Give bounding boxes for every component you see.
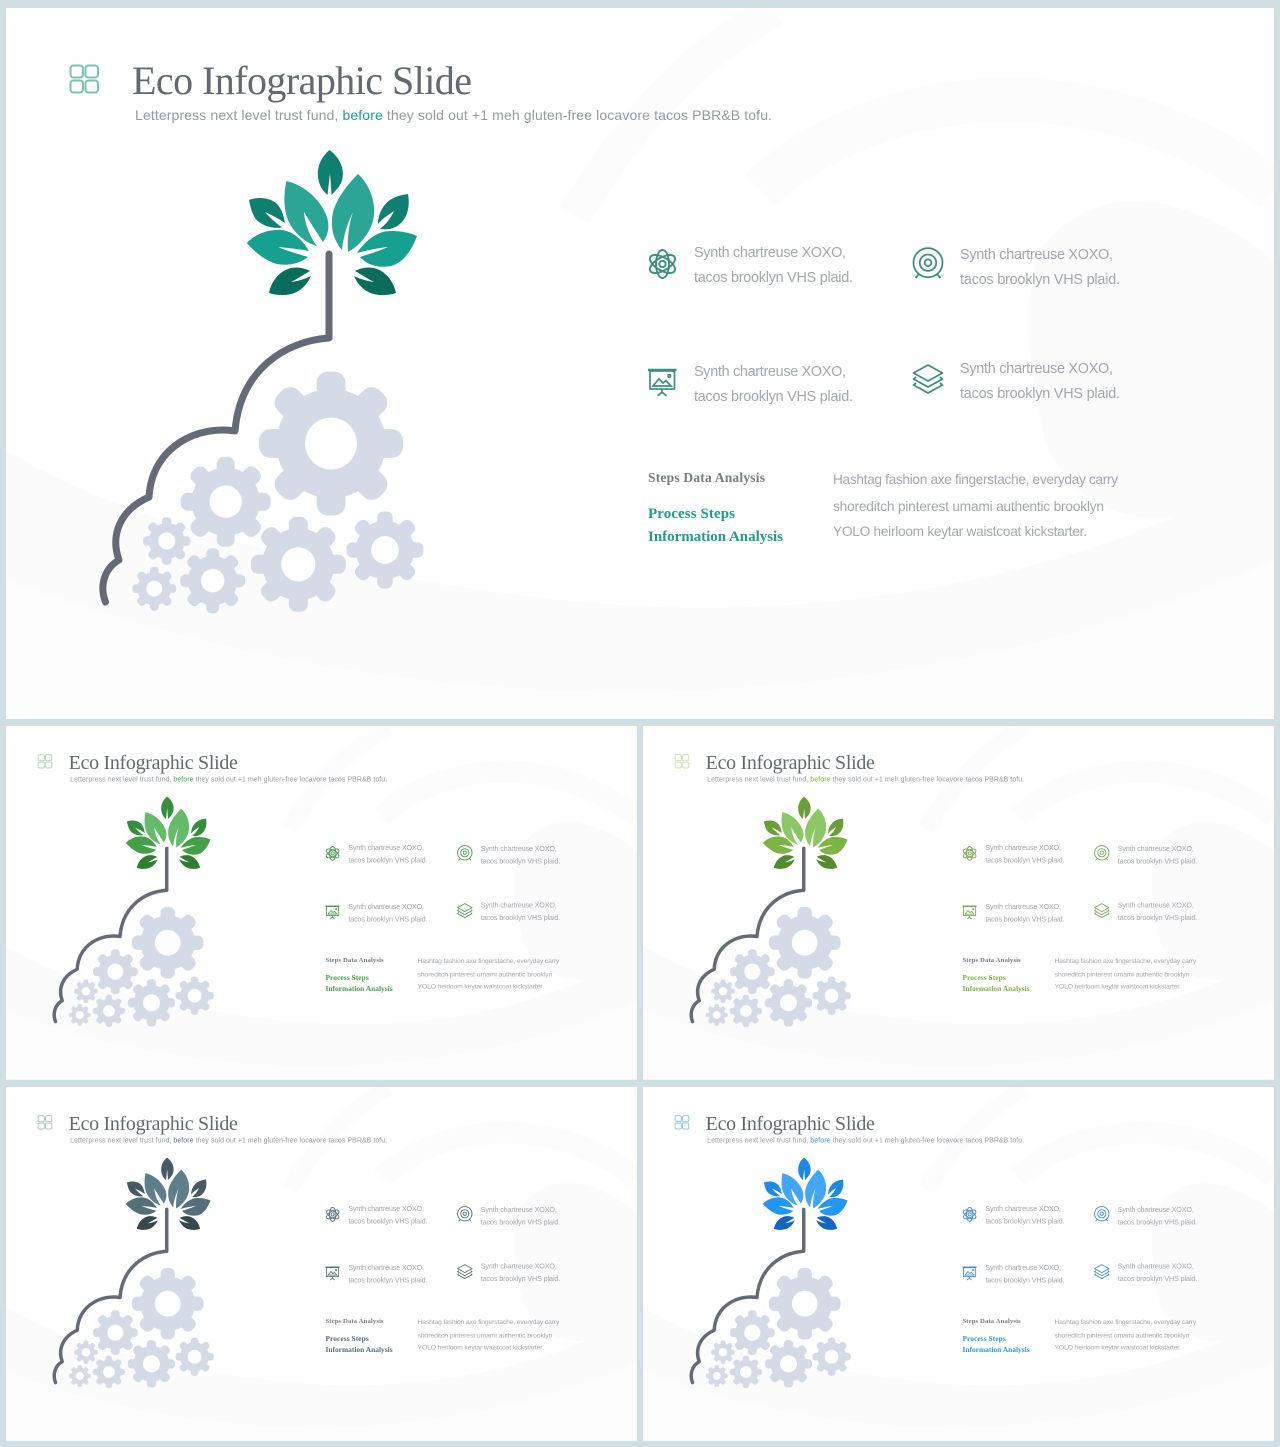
feature text 4 xyxy=(481,1263,560,1283)
paragraph: Hashtag fashion axe fingerstache, everyday carry xyxy=(1055,958,1197,965)
title: Eco Infographic Slide xyxy=(706,1113,875,1135)
paragraph: shoreditch pinterest umami authentic brooklyn xyxy=(418,1332,553,1339)
tree leaves xyxy=(763,797,848,869)
icon: presentation board xyxy=(325,906,340,919)
icon: target xyxy=(458,1207,472,1221)
process heading xyxy=(962,973,1030,993)
process heading: Process Steps xyxy=(325,1334,369,1343)
cloud outline stem xyxy=(103,254,329,602)
feature text 2: tacos brooklyn VHS plaid. xyxy=(481,857,560,865)
feature text 2: tacos brooklyn VHS plaid. xyxy=(1118,857,1197,865)
feature text 1 xyxy=(985,1205,1064,1225)
icon: target xyxy=(1095,1207,1109,1221)
icon: presentation board xyxy=(962,906,977,919)
paragraph: Hashtag fashion axe fingerstache, everyday carry xyxy=(418,1319,560,1326)
feature text 3 xyxy=(348,903,427,924)
steps heading: Steps Data Analysis xyxy=(648,470,765,485)
subtitle: Letterpress next level trust fund, before they sold out +1 meh gluten-free locavore tacos PBR&B tofu. xyxy=(70,777,387,784)
icon: target xyxy=(914,248,942,278)
feature text 1 xyxy=(348,844,427,864)
paragraph: YOLO heirloom keytar waistcoat kickstarter. xyxy=(1055,984,1181,991)
process heading: Information Analysis xyxy=(325,1345,393,1354)
cloud outline stem xyxy=(691,1209,804,1383)
feature text 2 xyxy=(481,1206,560,1226)
steps heading: Steps Data Analysis xyxy=(325,957,384,964)
icon: title grid xyxy=(38,1116,52,1129)
feature text 1: tacos brooklyn VHS plaid. xyxy=(348,1217,427,1225)
paragraph: Hashtag fashion axe fingerstache, everyday carry xyxy=(418,958,560,965)
feature text 1: tacos brooklyn VHS plaid. xyxy=(694,270,853,286)
feature text 2: Synth chartreuse XOXO, xyxy=(481,1206,557,1214)
subtitle: Letterpress next level trust fund, before they sold out +1 meh gluten-free locavore tacos PBR&B tofu. xyxy=(70,1138,387,1145)
feature text 3: tacos brooklyn VHS plaid. xyxy=(985,1277,1064,1285)
title: Eco Infographic Slide xyxy=(706,752,875,774)
feature text 1: tacos brooklyn VHS plaid. xyxy=(348,856,427,864)
paragraph xyxy=(1055,958,1197,991)
process heading: Process Steps xyxy=(648,506,735,522)
process heading: Information Analysis xyxy=(325,984,393,993)
process heading: Information Analysis xyxy=(648,529,783,545)
icon: presentation board xyxy=(325,1267,340,1280)
paragraph: shoreditch pinterest umami authentic brooklyn xyxy=(418,971,553,978)
icon: title grid xyxy=(38,755,52,768)
feature text 1: Synth chartreuse XOXO, xyxy=(348,844,424,852)
feature text 4: tacos brooklyn VHS plaid. xyxy=(960,386,1120,402)
feature text 2: Synth chartreuse XOXO, xyxy=(481,845,557,853)
feature text 3 xyxy=(348,1264,427,1285)
icon: layers xyxy=(1095,1265,1109,1279)
feature text 3: tacos brooklyn VHS plaid. xyxy=(985,916,1064,924)
process heading xyxy=(325,973,393,993)
feature text 3 xyxy=(694,364,853,405)
feature text 1: tacos brooklyn VHS plaid. xyxy=(985,856,1064,864)
feature text 2 xyxy=(960,247,1120,288)
icon: title grid xyxy=(675,1116,689,1129)
feature text 2 xyxy=(1118,1206,1197,1226)
tree leaves xyxy=(763,1158,848,1230)
process heading xyxy=(962,1334,1030,1354)
feature text 4: tacos brooklyn VHS plaid. xyxy=(481,914,560,922)
feature text 3 xyxy=(985,903,1064,924)
paragraph xyxy=(833,472,1118,539)
subtitle: Letterpress next level trust fund, before they sold out +1 meh gluten-free locavore tacos PBR&B tofu. xyxy=(707,1138,1024,1145)
feature text 2: Synth chartreuse XOXO, xyxy=(960,247,1113,263)
tree leaves xyxy=(126,1158,211,1230)
feature text 3: Synth chartreuse XOXO, xyxy=(985,903,1061,911)
feature text 2 xyxy=(1118,845,1197,865)
icon: presentation board xyxy=(962,1267,977,1280)
paragraph: shoreditch pinterest umami authentic brooklyn xyxy=(1055,1332,1190,1339)
feature text 4: Synth chartreuse XOXO, xyxy=(1118,902,1194,910)
gears cluster xyxy=(69,907,214,1027)
icon: layers xyxy=(458,1265,472,1279)
feature text 3: Synth chartreuse XOXO, xyxy=(348,903,424,911)
title: Eco Infographic Slide xyxy=(132,58,472,103)
paragraph: YOLO heirloom keytar waistcoat kickstarter. xyxy=(418,984,544,991)
paragraph: Hashtag fashion axe fingerstache, everyday carry xyxy=(1055,1319,1197,1326)
icon: title grid xyxy=(70,66,98,92)
feature text 4 xyxy=(1118,1263,1197,1283)
gears cluster xyxy=(132,372,424,613)
feature text 4: tacos brooklyn VHS plaid. xyxy=(481,1275,560,1283)
feature text 3: Synth chartreuse XOXO, xyxy=(694,364,846,380)
feature text 3: tacos brooklyn VHS plaid. xyxy=(348,916,427,924)
feature text 4: tacos brooklyn VHS plaid. xyxy=(1118,914,1197,922)
feature text 2: tacos brooklyn VHS plaid. xyxy=(481,1218,560,1226)
paragraph: YOLO heirloom keytar waistcoat kickstarter. xyxy=(833,524,1087,539)
feature text 3: tacos brooklyn VHS plaid. xyxy=(694,389,853,405)
tree leaves xyxy=(126,797,211,869)
icon: layers xyxy=(458,904,472,918)
panel: blue slide xyxy=(643,1087,1274,1441)
paragraph xyxy=(1055,1319,1197,1352)
steps heading: Steps Data Analysis xyxy=(962,1318,1021,1325)
feature text 4: Synth chartreuse XOXO, xyxy=(1118,1263,1194,1271)
feature text 2: tacos brooklyn VHS plaid. xyxy=(1118,1218,1197,1226)
panel: main teal slide xyxy=(6,8,1274,719)
icon: atom xyxy=(325,846,340,860)
paragraph xyxy=(418,958,560,991)
paragraph: shoreditch pinterest umami authentic brooklyn xyxy=(833,499,1104,514)
icon: presentation board xyxy=(648,370,676,396)
subtitle: Letterpress next level trust fund, before they sold out +1 meh gluten-free locavore tacos PBR&B tofu. xyxy=(135,107,772,123)
icon: atom xyxy=(962,1207,977,1221)
feature text 3 xyxy=(985,1264,1064,1285)
process heading: Process Steps xyxy=(962,973,1006,982)
feature text 1: Synth chartreuse XOXO, xyxy=(694,245,846,261)
gears cluster xyxy=(706,1268,851,1388)
feature text 4: Synth chartreuse XOXO, xyxy=(481,1263,557,1271)
icon: target xyxy=(1095,846,1109,860)
process heading xyxy=(325,1334,393,1354)
process heading: Information Analysis xyxy=(962,984,1030,993)
process heading: Information Analysis xyxy=(962,1345,1030,1354)
gears cluster xyxy=(69,1268,214,1388)
feature text 3: Synth chartreuse XOXO, xyxy=(348,1264,424,1272)
feature text 2 xyxy=(481,845,560,865)
feature text 1: Synth chartreuse XOXO, xyxy=(985,844,1061,852)
process heading: Process Steps xyxy=(962,1334,1006,1343)
paragraph: shoreditch pinterest umami authentic brooklyn xyxy=(1055,971,1190,978)
panel: slate slide xyxy=(6,1087,637,1441)
cloud outline stem xyxy=(54,1209,167,1383)
feature text 4 xyxy=(1118,902,1197,922)
icon: atom xyxy=(325,1207,340,1221)
feature text 4: Synth chartreuse XOXO, xyxy=(960,361,1113,377)
cloud outline stem xyxy=(54,848,167,1022)
subtitle: Letterpress next level trust fund, before they sold out +1 meh gluten-free locavore tacos PBR&B tofu. xyxy=(707,777,1024,784)
paragraph: YOLO heirloom keytar waistcoat kickstarter. xyxy=(418,1345,544,1352)
icon: atom xyxy=(962,846,977,860)
gears cluster xyxy=(706,907,851,1027)
icon: title grid xyxy=(675,755,689,768)
panel: green slide xyxy=(6,726,637,1080)
feature text 2: Synth chartreuse XOXO, xyxy=(1118,1206,1194,1214)
icon: atom xyxy=(647,250,678,278)
icon: layers xyxy=(1095,904,1109,918)
feature text 3: Synth chartreuse XOXO, xyxy=(985,1264,1061,1272)
process heading xyxy=(648,506,783,545)
feature text 2: tacos brooklyn VHS plaid. xyxy=(960,272,1120,288)
steps heading: Steps Data Analysis xyxy=(325,1318,384,1325)
icon: layers xyxy=(914,365,942,393)
feature text 3: tacos brooklyn VHS plaid. xyxy=(348,1277,427,1285)
paragraph xyxy=(418,1319,560,1352)
feature text 1: Synth chartreuse XOXO, xyxy=(985,1205,1061,1213)
feature text 4 xyxy=(481,902,560,922)
tree leaves xyxy=(247,150,417,295)
feature text 1 xyxy=(694,245,853,286)
feature text 1 xyxy=(985,844,1064,864)
feature text 4: Synth chartreuse XOXO, xyxy=(481,902,557,910)
icon: target xyxy=(458,846,472,860)
cloud outline stem xyxy=(691,848,804,1022)
feature text 1 xyxy=(348,1205,427,1225)
steps heading: Steps Data Analysis xyxy=(962,957,1021,964)
feature text 1: Synth chartreuse XOXO, xyxy=(348,1205,424,1213)
panel: lime slide xyxy=(643,726,1274,1080)
feature text 4 xyxy=(960,361,1120,402)
title: Eco Infographic Slide xyxy=(69,752,238,774)
feature text 1: tacos brooklyn VHS plaid. xyxy=(985,1217,1064,1225)
paragraph: YOLO heirloom keytar waistcoat kickstarter. xyxy=(1055,1345,1181,1352)
feature text 2: Synth chartreuse XOXO, xyxy=(1118,845,1194,853)
title: Eco Infographic Slide xyxy=(69,1113,238,1135)
process heading: Process Steps xyxy=(325,973,369,982)
feature text 4: tacos brooklyn VHS plaid. xyxy=(1118,1275,1197,1283)
paragraph: Hashtag fashion axe fingerstache, everyday carry xyxy=(833,472,1118,487)
